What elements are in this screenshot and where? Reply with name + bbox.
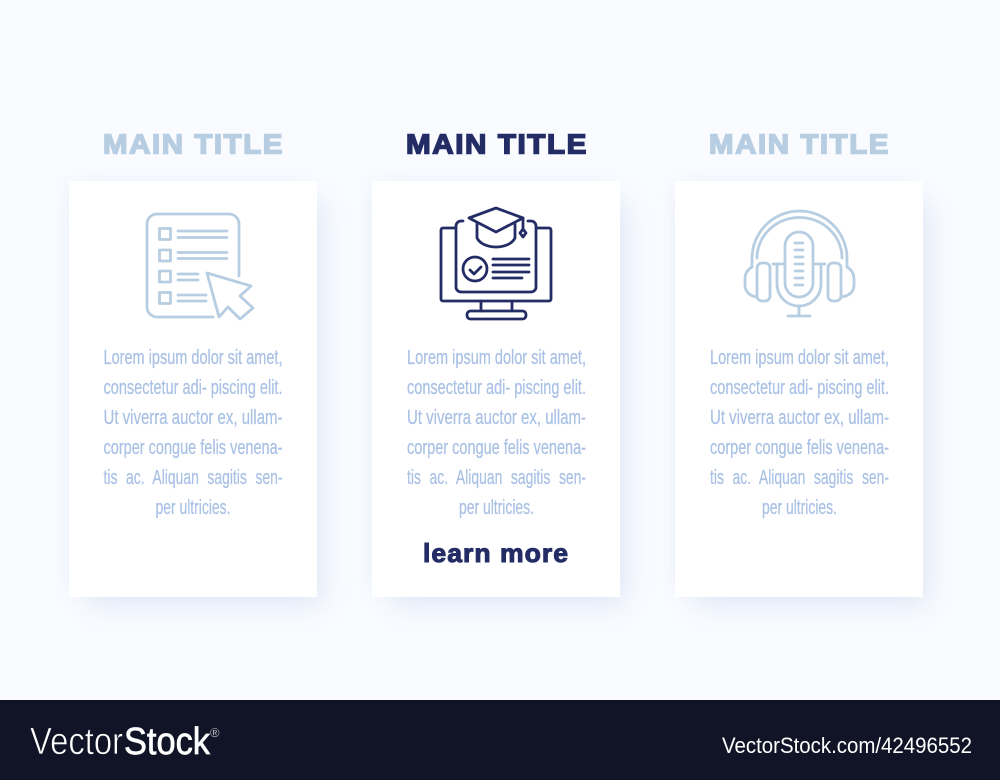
text block: left description: Lorem ipsum dolor sit amet, bbox=[104, 346, 282, 369]
panel: right card bbox=[688, 128, 935, 611]
panel: left card bbox=[82, 128, 329, 611]
heading: left main title: MAIN TITLE bbox=[103, 128, 284, 160]
text block: left description: consectetur adi- piscing elit. bbox=[104, 376, 282, 399]
text block: center description bbox=[407, 346, 586, 519]
text block: left description: Ut viverra auctor ex, ullam- bbox=[104, 406, 282, 429]
heading: right main title: MAIN TITLE bbox=[709, 128, 890, 160]
logo: VectorStock: Stock bbox=[124, 721, 211, 763]
text block: right description: consectetur adi- piscing elit. bbox=[710, 376, 889, 399]
text block: right description: Ut viverra auctor ex, ullam- bbox=[710, 406, 889, 429]
text block: center description: Lorem ipsum dolor sit amet, bbox=[407, 346, 586, 369]
text block: right description: tis ac. Aliquan sagitis sen- bbox=[710, 466, 889, 489]
text block: left description: corper congue felis venena- bbox=[104, 436, 282, 459]
text block: right description bbox=[710, 346, 889, 519]
logo: VectorStock: ® bbox=[210, 725, 220, 740]
text block: right description: per ultricies. bbox=[762, 496, 837, 519]
link: learn more: learn more bbox=[423, 538, 569, 568]
icon: checklist with cursor bbox=[147, 214, 253, 319]
footer bar bbox=[0, 700, 1000, 780]
text block: center description: corper congue felis venena- bbox=[407, 436, 586, 459]
heading: center main title: MAIN TITLE bbox=[406, 128, 588, 160]
text block: center description: per ultricies. bbox=[459, 496, 534, 519]
logo: VectorStock: Vector bbox=[30, 721, 123, 763]
panel: center card bbox=[385, 128, 632, 611]
logo: VectorStock bbox=[30, 721, 220, 763]
text block: left description: per ultricies. bbox=[156, 496, 230, 519]
icon: monitor with graduation cap bbox=[441, 208, 551, 319]
text block: right description: Lorem ipsum dolor sit amet, bbox=[710, 346, 889, 369]
watermark id: VectorStock.com/42496552 bbox=[722, 733, 972, 758]
text block: right description: corper congue felis venena- bbox=[710, 436, 889, 459]
text block: left description: tis ac. Aliquan sagitis sen- bbox=[104, 466, 282, 489]
text block: center description: Ut viverra auctor ex, ullam- bbox=[407, 406, 586, 429]
text block: center description: consectetur adi- piscing elit. bbox=[407, 376, 586, 399]
text block: center description: tis ac. Aliquan sagitis sen- bbox=[407, 466, 586, 489]
text block: left description bbox=[104, 346, 282, 519]
icon: microphone with headphones bbox=[745, 211, 854, 316]
